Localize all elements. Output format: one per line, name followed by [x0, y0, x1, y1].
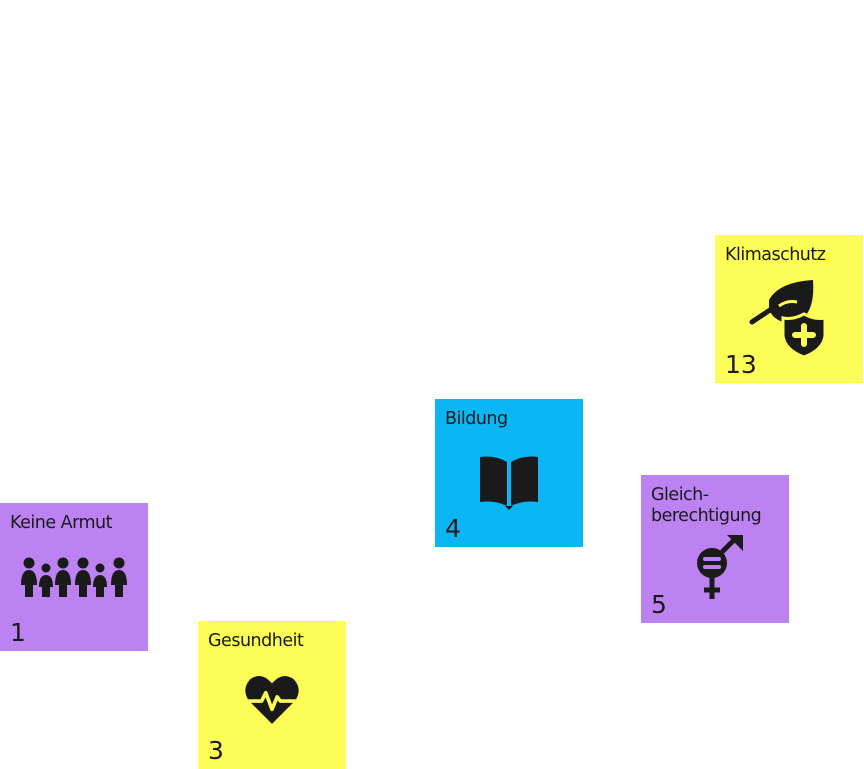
- card: Gesundheit: [198, 621, 346, 769]
- icon: gender: [697, 535, 743, 599]
- icon: book: [480, 456, 538, 510]
- icon: people: [21, 558, 127, 597]
- card: Gleichberechtigung: [641, 475, 789, 623]
- title: Gleichberechtigung: Gleich-: [651, 485, 709, 505]
- title: Gesundheit: Gesundheit: [208, 631, 303, 651]
- title: Keine Armut: Keine Armut: [10, 513, 112, 533]
- number 4: 4: [445, 514, 461, 543]
- number 3: 3: [208, 736, 224, 765]
- icon: leaf with shield: [750, 280, 824, 356]
- card: Klimaschutz: [715, 235, 863, 383]
- number 13: 13: [725, 350, 757, 379]
- card: Keine Armut: [0, 503, 148, 651]
- number 5: 5: [651, 590, 667, 619]
- card: Bildung: [435, 399, 583, 547]
- title: Bildung: Bildung: [445, 409, 508, 429]
- title: Gleichberechtigung: [651, 485, 761, 526]
- title: Gleichberechtigung: berechtigung: [651, 506, 761, 526]
- number 1: 1: [10, 618, 26, 647]
- icon: heart: [245, 676, 299, 724]
- title: Klimaschutz: Klimaschutz: [725, 245, 825, 265]
